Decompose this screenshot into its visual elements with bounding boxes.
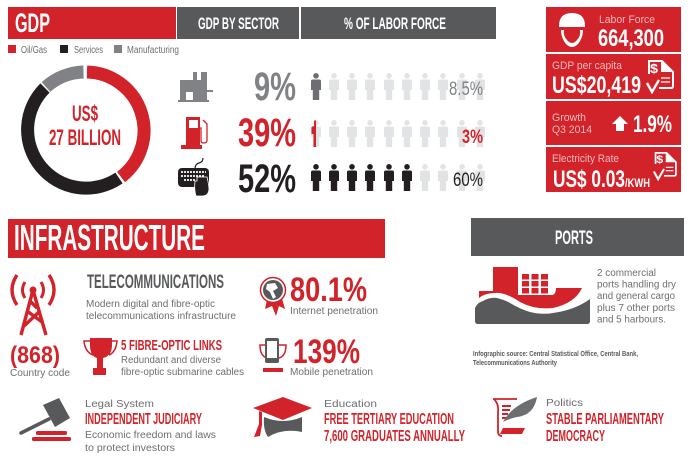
legal system text: to protect investors — [85, 443, 175, 454]
donut chart: GDP US$ 27 billion: US$ — [72, 101, 98, 126]
heading: infrastructure: INFRASTRUCTURE — [14, 217, 205, 258]
header: ports: PORTS — [555, 228, 593, 249]
legend — [8, 45, 179, 56]
legal system text — [85, 399, 216, 454]
education text: FREE TERTIARY EDUCATION — [324, 411, 454, 428]
stat: mobile penetration: Mobile penetration — [290, 367, 373, 378]
education text: Education — [324, 399, 377, 410]
header: percent of labor force — [301, 7, 496, 39]
education text — [324, 399, 465, 445]
panel: GDP per capita: GDP per capita — [552, 60, 623, 72]
icon: up arrow — [612, 116, 628, 131]
panel: growth: 1.9% — [633, 111, 672, 138]
icon: graduation cap — [253, 397, 312, 437]
icon: fuel pump — [181, 117, 207, 149]
panel: electricity rate: US$ 0.03 — [553, 166, 625, 193]
politics text — [546, 398, 664, 445]
ports description: and general cargo — [597, 291, 675, 302]
source note — [473, 351, 638, 367]
icon: cargo ship — [475, 267, 590, 324]
ports description: ports handling dry — [597, 280, 676, 290]
source note: Infographic source: Central Statistical Office, Central Bank, — [473, 351, 638, 358]
panel: labor force: Labor Force — [599, 14, 655, 26]
fibre-optic links text — [121, 337, 244, 378]
panel: electricity rate — [546, 147, 681, 193]
icon: keyboard — [178, 158, 209, 196]
panel: labor force — [546, 7, 681, 52]
icon: document — [647, 61, 673, 92]
fibre-optic links text: 5 FIBRE-OPTIC LINKS — [121, 337, 222, 354]
stat: mobile penetration: 139% — [293, 333, 360, 371]
panel: growth: Growth — [552, 112, 586, 124]
stat: manufacturing 9%: 9% — [254, 65, 296, 109]
ports description: plus 7 other ports — [597, 303, 675, 314]
pictogram row: manufacturing labor 8.5%: 8.5% — [449, 79, 483, 100]
pictogram row: manufacturing labor 8.5% — [311, 73, 485, 100]
politics text: DEMOCRACY — [546, 428, 605, 445]
stat: internet penetration: Internet penetration — [290, 306, 378, 317]
country code — [10, 342, 70, 379]
education text: 7,600 GRADUATES ANNUALLY — [324, 428, 465, 445]
ports description: and 5 harbours. — [597, 314, 666, 326]
header: GDP — [8, 7, 176, 39]
stat: internet penetration: 80.1% — [290, 271, 367, 309]
stat: services 52%: 52% — [238, 157, 296, 201]
pictogram row: services labor 60% — [311, 164, 485, 191]
country code: Country code — [10, 368, 70, 379]
ports description: 2 commercial — [597, 268, 656, 279]
icon: globe ribbon — [260, 278, 286, 316]
legal system text: Legal System — [85, 399, 154, 410]
header: ports — [471, 218, 684, 256]
legend: Services — [74, 45, 103, 56]
icon: mobile phone — [260, 338, 286, 372]
country code: (868) — [10, 342, 60, 369]
header: GDP by sector: GDP BY SECTOR — [198, 15, 279, 33]
pictogram row: services labor 60%: 60% — [453, 170, 483, 191]
icon: trophy — [84, 338, 117, 375]
telecommunications text: TELECOMMUNICATIONS — [87, 272, 224, 293]
panel: electricity rate: Electricity Rate — [552, 153, 619, 165]
icon: parchment and quill — [493, 397, 537, 436]
fibre-optic links text: fibre-optic submarine cables — [121, 367, 244, 378]
icon: factory — [178, 72, 213, 102]
panel: GDP per capita — [546, 54, 681, 99]
legal system text: INDEPENDENT JUDICIARY — [85, 411, 202, 428]
header: GDP by sector — [177, 7, 299, 39]
panel: electricity rate: /KWH — [625, 176, 650, 190]
panel: growth — [546, 101, 681, 145]
icon: gavel — [21, 398, 71, 441]
legend: Oil/Gas — [21, 45, 47, 56]
panel: GDP per capita: US$20,419 — [552, 72, 641, 99]
icon: hard hat — [559, 13, 585, 47]
ports description — [597, 268, 676, 326]
donut chart: GDP US$ 27 billion — [28, 72, 144, 188]
panel: growth: Q3 2014 — [552, 124, 592, 136]
header: percent of labor force: % OF LABOR FORCE — [344, 15, 446, 33]
icon: radio tower — [12, 275, 54, 335]
pictogram row: oil and gas labor 3% — [311, 120, 485, 148]
politics text: Politics — [546, 398, 583, 409]
header: GDP: GDP — [15, 8, 50, 38]
telecommunications text: telecommunications infrastructure — [86, 311, 236, 322]
telecommunications text — [86, 272, 236, 322]
legend: Manufacturing — [127, 45, 179, 56]
icon: document — [654, 153, 676, 179]
stat: oil and gas 39%: 39% — [238, 111, 296, 155]
donut chart: GDP US$ 27 billion: 27 BILLION — [49, 125, 121, 150]
panel: labor force: 664,300 — [598, 25, 664, 52]
telecommunications text: Modern digital and fibre-optic — [86, 299, 215, 310]
legal system text: Economic freedom and laws — [85, 430, 216, 441]
source note: Telecommunications Authority — [473, 360, 557, 367]
pictogram row: oil and gas labor 3%: 3% — [462, 127, 483, 148]
fibre-optic links text: Redundant and diverse — [121, 355, 221, 366]
